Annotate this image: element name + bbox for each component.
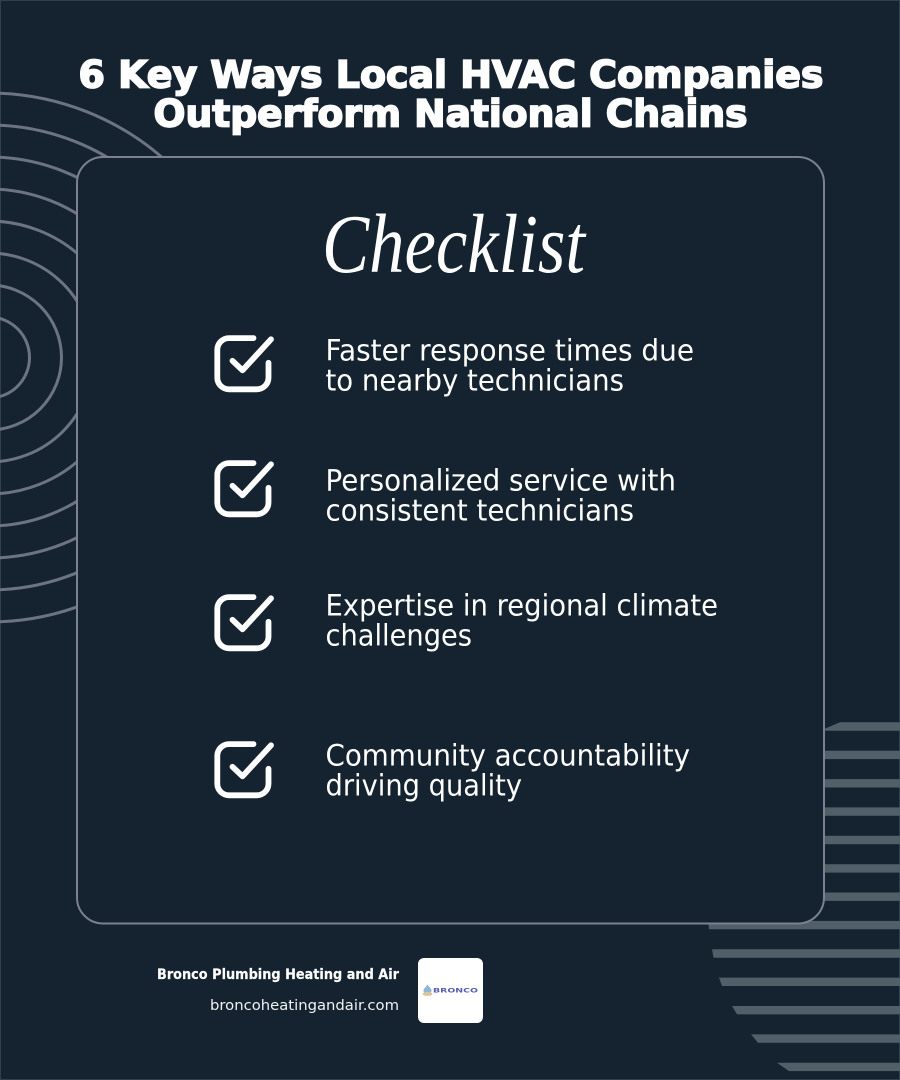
icon: checkbox	[217, 744, 271, 795]
item text: Personalized service with	[326, 464, 676, 498]
item text: driving quality	[326, 768, 522, 802]
footer company name: Bronco Plumbing Heating and Air	[157, 967, 399, 983]
checklist item 1	[217, 334, 694, 398]
title: 6 Key Ways Local HVAC Companies	[78, 54, 823, 96]
item text	[326, 464, 676, 528]
item text: challenges	[326, 618, 472, 652]
item text: Community accountability	[326, 738, 690, 772]
title: Outperform National Chains	[154, 92, 748, 136]
item text: to nearby technicians	[326, 364, 624, 398]
icon: checkbox	[217, 463, 271, 514]
icon: checkbox	[217, 338, 271, 389]
logo wordmark: BRONCO	[433, 986, 479, 994]
decorative stripes	[708, 722, 900, 1071]
footer website: broncoheatingandair.com	[210, 998, 399, 1014]
icon: logo droplet	[422, 984, 432, 996]
item text: consistent technicians	[326, 494, 634, 528]
logo	[418, 958, 483, 1023]
card background	[77, 157, 824, 924]
item text: Faster response times due	[326, 334, 694, 368]
logo tile	[418, 958, 483, 1023]
icon: checkbox	[217, 597, 271, 648]
item text	[326, 334, 694, 398]
item text	[326, 588, 718, 652]
checklist item 2	[217, 463, 676, 528]
checklist item 3	[217, 588, 718, 652]
panel: checklist card	[77, 157, 824, 924]
title	[78, 54, 823, 136]
item text	[326, 738, 690, 802]
item text: Expertise in regional climate	[326, 588, 718, 622]
decorative concentric circles	[0, 93, 254, 622]
card heading: Checklist	[322, 198, 587, 291]
checklist item 4	[217, 738, 690, 802]
